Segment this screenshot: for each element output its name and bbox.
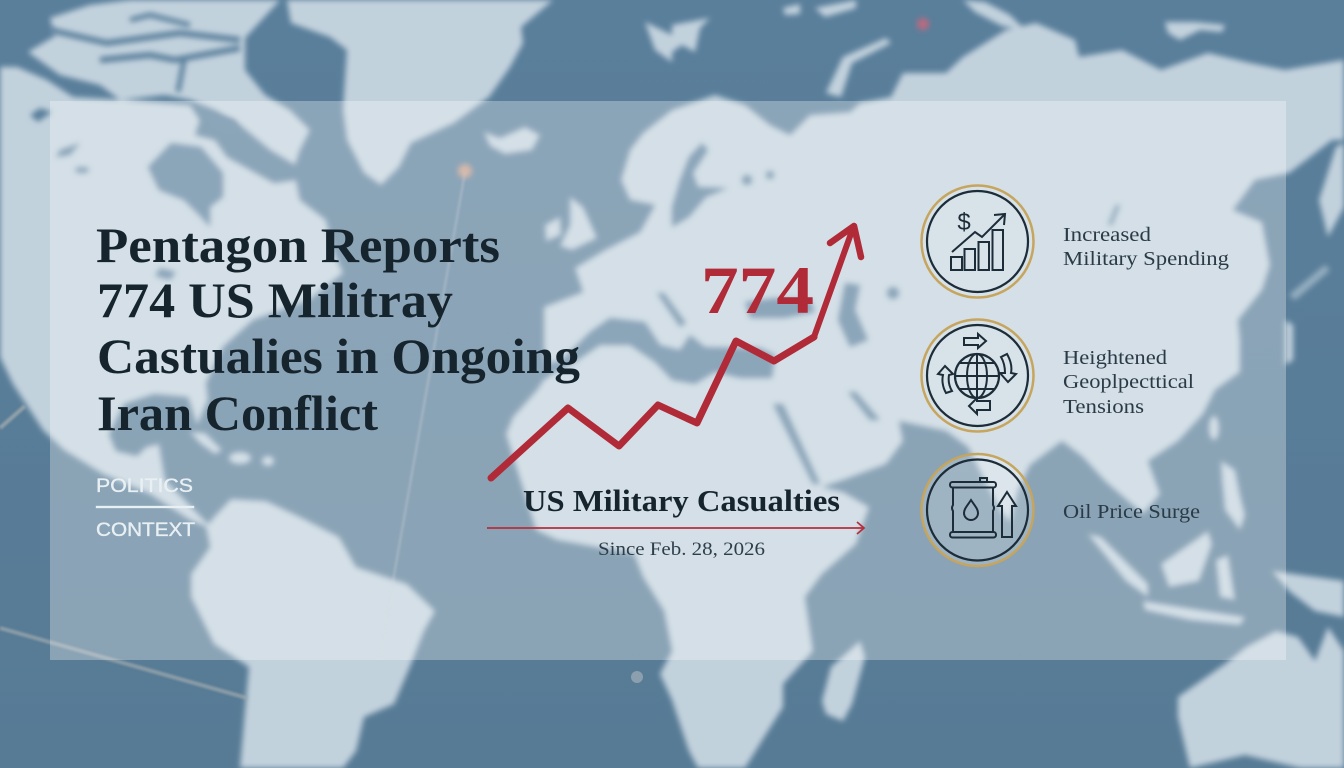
timeline arrow <box>487 522 864 534</box>
label: geopolitical tensions: Geoplpecttical <box>1063 371 1194 393</box>
category tags <box>96 476 195 541</box>
label: geopolitical tensions: Heightened <box>1063 347 1167 369</box>
title: Iran Conflict <box>97 385 378 441</box>
icon: military spending <box>922 186 1034 298</box>
label: geopolitical tensions <box>1063 347 1194 418</box>
icon: globe with arrows <box>922 320 1034 432</box>
category tags: CONTEXT <box>96 520 195 541</box>
label: military spending: Increased <box>1063 224 1151 246</box>
title <box>96 217 580 441</box>
trend line chart <box>491 226 861 478</box>
chart label: US Military Casualties <box>523 483 840 518</box>
date note: Since Feb. 28, 2026 <box>598 539 765 560</box>
icon: military spending: $ <box>957 209 971 236</box>
title: Castualies in Ongoing <box>97 328 580 384</box>
label: military spending <box>1063 224 1229 270</box>
label: oil price surge: Oil Price Surge <box>1063 501 1200 523</box>
title: Pentagon Reports <box>96 217 500 273</box>
title: 774 US Militray <box>97 272 453 328</box>
big number: 774 <box>701 252 814 328</box>
translucent panel <box>50 101 1286 660</box>
label: geopolitical tensions: Tensions <box>1063 396 1144 418</box>
icon: oil barrel <box>922 454 1034 566</box>
label: military spending: Military Spending <box>1063 248 1229 270</box>
category tags: POLITICS <box>96 476 193 497</box>
flight path lines <box>0 172 465 698</box>
